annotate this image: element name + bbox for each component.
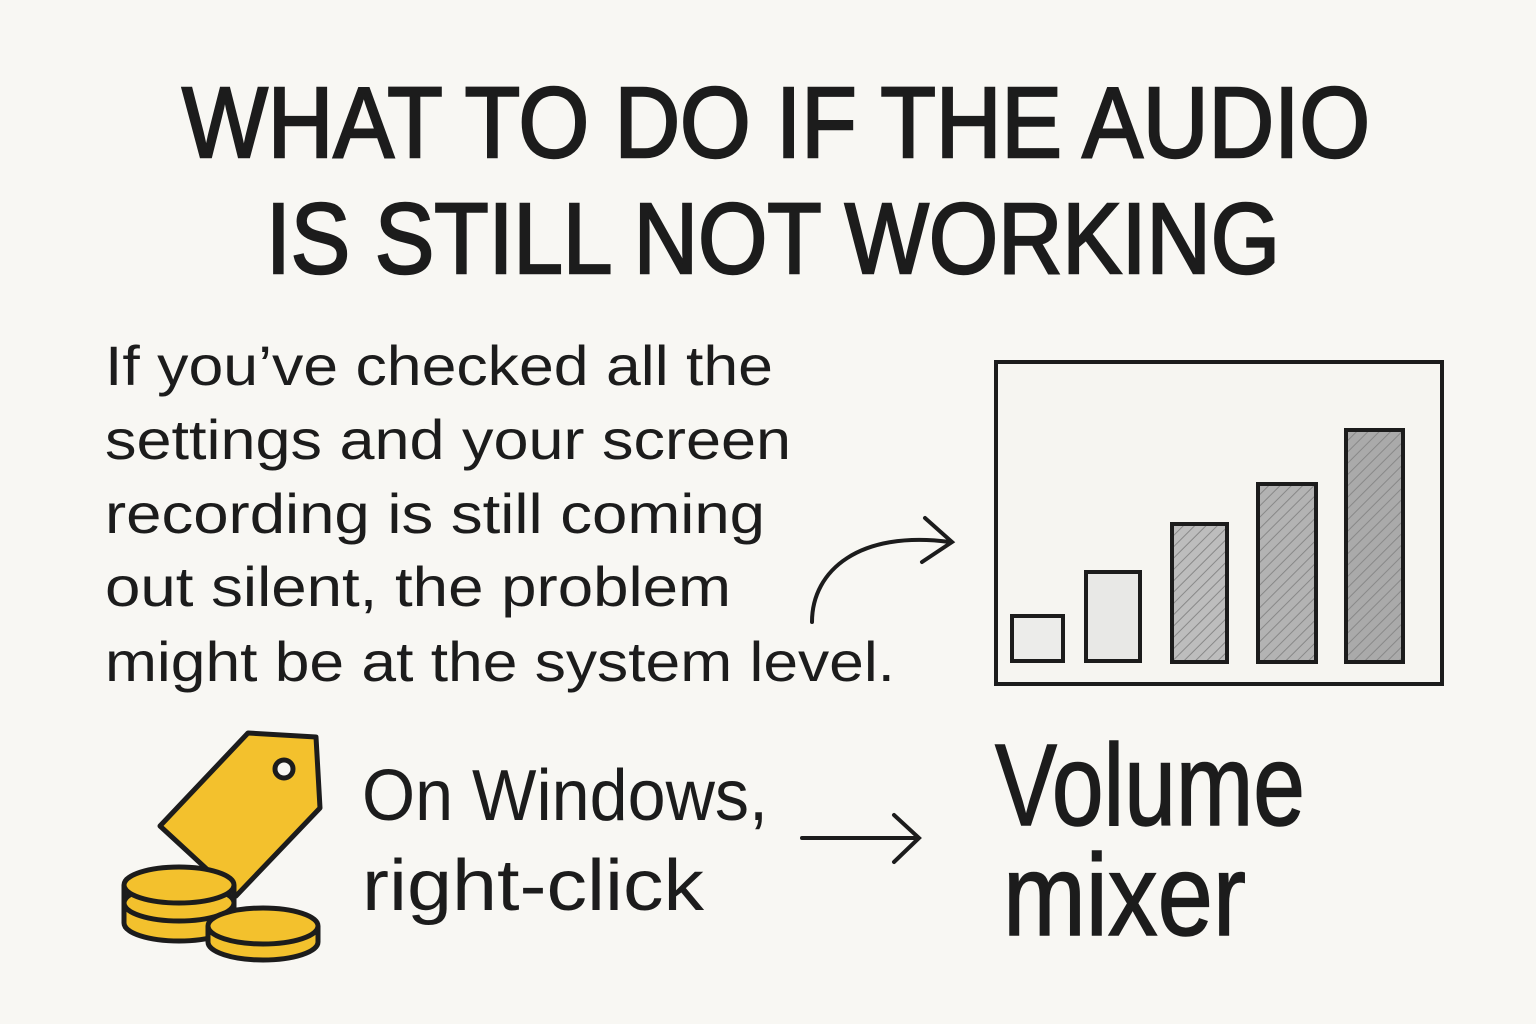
arrow: straight [802,815,919,862]
text block: explanation: settings and your screen [105,408,791,471]
text block: explanation: recording is still coming [105,482,765,545]
text: Volume mixer: mixer [1003,830,1246,960]
title: IS STILL NOT WORKING [266,183,1280,295]
title: WHAT TO DO IF THE AUDIO [182,67,1370,179]
text: Volume mixer: Volume [995,720,1305,850]
icon: price tag and coins [124,733,320,960]
text: Volume mixer [995,720,1305,960]
title [182,67,1370,295]
text: On Windows, right-click: right-click [362,846,705,926]
text block: explanation [105,334,895,693]
text block: explanation: out silent, the problem [105,555,731,618]
text block: explanation: might be at the system level. [105,630,895,693]
text block: explanation: If you’ve checked all the [105,334,773,397]
text: On Windows, right-click [362,756,768,926]
chart: volume bars [996,362,1442,684]
text: On Windows, right-click: On Windows, [362,756,768,836]
arrow: curved to chart [812,518,952,622]
